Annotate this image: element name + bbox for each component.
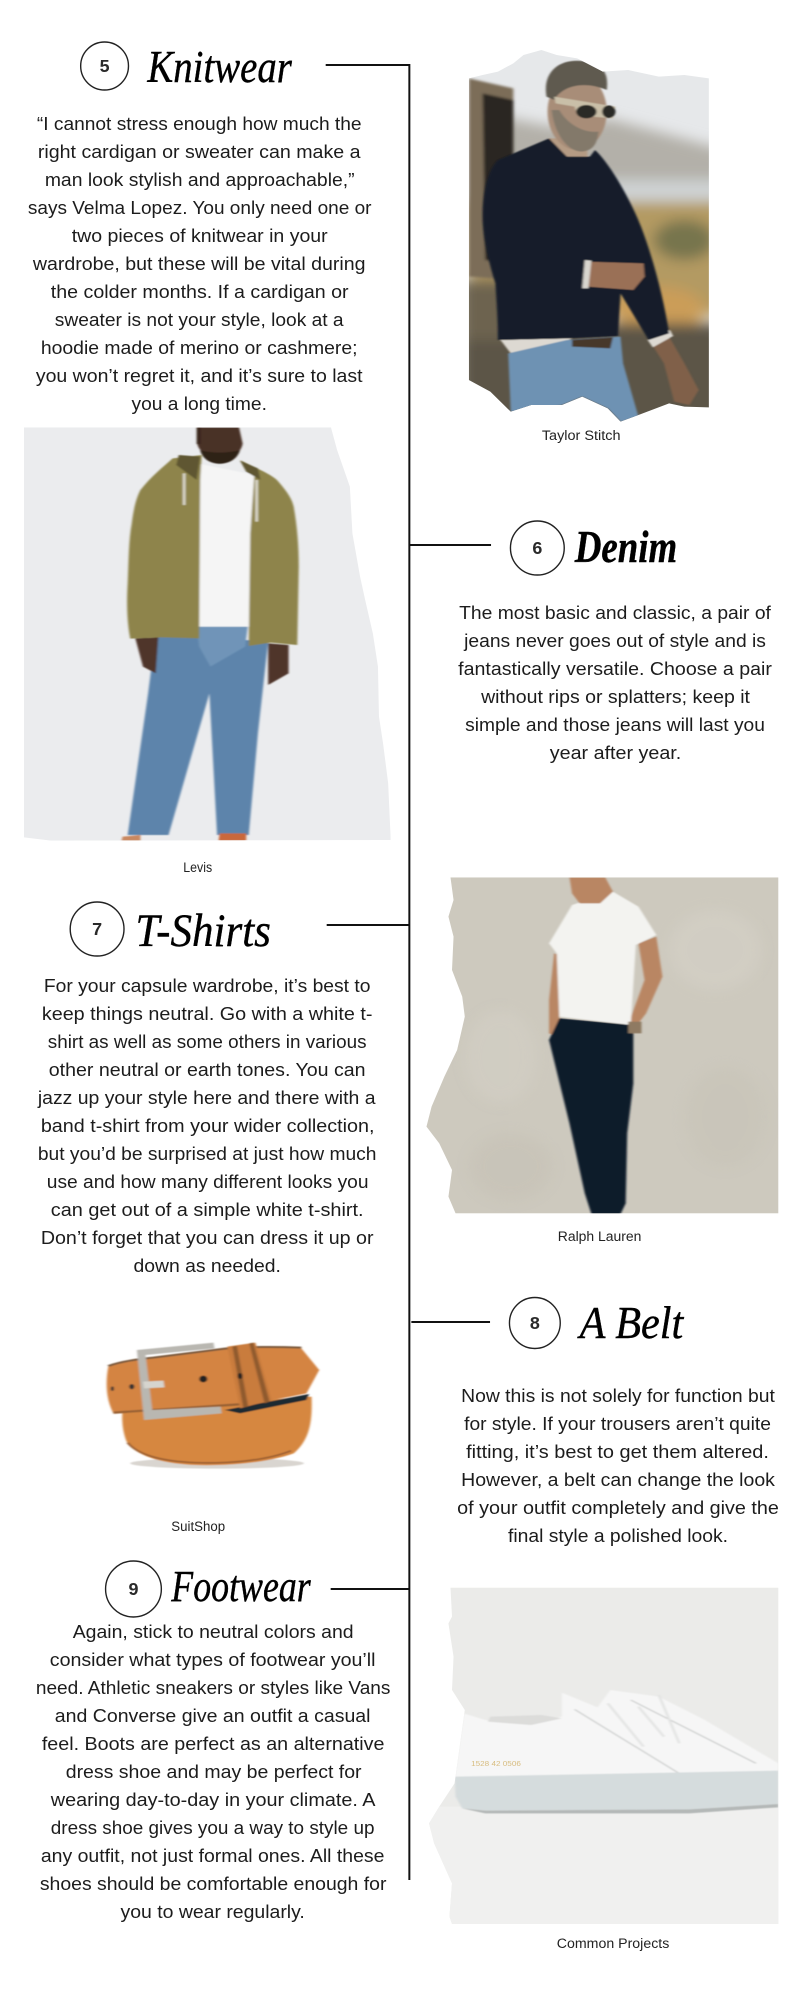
title A Belt: A Belt	[577, 1297, 684, 1348]
text block: footwear: feel. Boots are perfect as an alternative	[42, 1733, 384, 1754]
photo: white sneakers, Common Projects	[424, 1587, 781, 1925]
photo: man in white tee, Ralph Lauren	[424, 877, 781, 1215]
text block: t-shirts: can get out of a simple white t-shirt.	[51, 1199, 364, 1220]
connector line	[331, 1588, 409, 1590]
text block: knitwear	[28, 113, 372, 414]
head	[548, 73, 607, 150]
shoe upper	[455, 1690, 778, 1778]
photo: man in olive hoodie, Levis	[20, 427, 393, 843]
number badge 6	[510, 521, 564, 575]
photo: tan leather belt, SuitShop	[107, 1343, 319, 1469]
text block: t-shirts: other neutral or earth tones. You can	[49, 1059, 366, 1080]
hands	[135, 637, 158, 673]
text block: knitwear: “I cannot stress enough how much the	[37, 113, 362, 134]
text block: knitwear: says Velma Lopez. You only need one or	[28, 197, 372, 218]
text block: footwear: and Converse give an outfit a casual	[55, 1705, 371, 1726]
text block: knitwear: sweater is not your style, look at a	[55, 309, 344, 330]
holes	[199, 1376, 207, 1382]
section 5: knitwear heading	[81, 42, 409, 92]
section 7: t-shirts heading	[70, 902, 409, 957]
photo: man in navy sweater, Taylor Stitch	[468, 50, 709, 422]
connector line	[411, 1321, 490, 1323]
number badge 9: 9	[128, 1579, 138, 1599]
number badge 5	[81, 42, 128, 90]
shoe stamp: 1528 42 0506	[471, 1761, 521, 1768]
text block: footwear: you to wear regularly.	[121, 1901, 305, 1922]
text block: a belt: of your outfit completely and give the	[457, 1497, 779, 1518]
number badge 6: 6	[532, 538, 542, 558]
shoes	[219, 833, 246, 841]
text block: denim	[458, 602, 772, 763]
neck	[569, 877, 613, 903]
text block: t-shirts: Don’t forget that you can dress it up or	[41, 1227, 373, 1248]
text block: a belt: fitting, it’s best to get them altered.	[466, 1441, 769, 1462]
skin and shirt details	[651, 337, 699, 405]
head	[197, 427, 243, 458]
text block: knitwear: two pieces of knitwear in your	[72, 225, 328, 246]
jeans	[128, 633, 268, 835]
text block: a belt: Now this is not solely for function but	[461, 1385, 775, 1406]
connector line	[326, 64, 409, 66]
caption Common Projects: Common Projects	[557, 1935, 669, 1951]
timeline spine	[408, 64, 410, 1880]
text block: denim: simple and those jeans will last you	[465, 714, 765, 735]
text block: footwear: any outfit, not just formal ones. All these	[41, 1845, 384, 1866]
section 6: denim heading	[409, 521, 677, 575]
keepers	[227, 1343, 272, 1408]
text block: t-shirts: band t-shirt from your wider collection,	[41, 1115, 374, 1136]
text block: denim: jeans never goes out of style and is	[463, 630, 766, 651]
text block: footwear: consider what types of footwear you’ll	[50, 1649, 375, 1670]
title Footwear: Footwear	[170, 1563, 311, 1611]
text block: a belt: final style a polished look.	[508, 1525, 728, 1546]
text block: knitwear: hoodie made of merino or cashmere;	[41, 337, 358, 358]
text block: knitwear: you won’t regret it, and it’s sure to last	[36, 365, 363, 386]
text block: knitwear: wardrobe, but these will be vital during	[32, 253, 366, 274]
caption Taylor Stitch: Taylor Stitch	[542, 427, 621, 443]
arms	[629, 937, 662, 1027]
text block: footwear	[36, 1621, 390, 1922]
text block: knitwear: right cardigan or sweater can make a	[38, 141, 361, 162]
pants	[549, 1018, 633, 1214]
text block: footwear: shoes should be comfortable enough for	[40, 1873, 386, 1894]
text block: t-shirts: keep things neutral. Go with a white t-	[42, 1003, 373, 1024]
sole	[455, 1771, 778, 1811]
text block: knitwear: you a long time.	[131, 393, 267, 414]
text block: denim: without rips or splatters; keep it	[480, 686, 750, 707]
buckle	[137, 1343, 222, 1420]
section 9: footwear heading	[106, 1561, 409, 1617]
title Denim: Denim	[574, 521, 677, 572]
text block: t-shirts: For your capsule wardrobe, it’s best to	[44, 975, 371, 996]
title Knitwear: Knitwear	[147, 42, 292, 92]
text block: footwear: need. Athletic sneakers or styles like Vans	[36, 1677, 390, 1698]
text block: denim: The most basic and classic, a pair of	[459, 602, 772, 623]
text block: denim: fantastically versatile. Choose a pair	[458, 658, 772, 679]
text block: knitwear: the colder months. If a cardigan or	[51, 281, 349, 302]
text block: t-shirts: jazz up your style here and there with a	[37, 1087, 376, 1108]
text block: footwear: dress shoe and may be perfect for	[66, 1761, 362, 1782]
text block: t-shirts: but you’d be surprised at just how much	[38, 1143, 376, 1164]
hoodie	[127, 455, 202, 639]
caption Ralph Lauren: Ralph Lauren	[558, 1228, 641, 1244]
text block: t-shirts	[37, 975, 376, 1276]
number badge 8	[509, 1298, 560, 1348]
caption Levis: Levis	[183, 859, 212, 875]
section 8: a belt heading	[411, 1297, 684, 1348]
caption SuitShop: SuitShop	[171, 1518, 225, 1534]
text block: footwear: dress shoe gives you a way to style up	[51, 1817, 374, 1838]
text block: knitwear: man look stylish and approachable,”	[45, 169, 355, 190]
text block: footwear: wearing day-to-day in your climate. A	[50, 1789, 376, 1810]
connector line	[327, 924, 409, 926]
tee	[549, 892, 656, 1025]
text block: a belt: However, a belt can change the look	[461, 1469, 776, 1490]
text block: t-shirts: down as needed.	[133, 1255, 281, 1276]
title T-Shirts: T-Shirts	[135, 905, 271, 957]
sweater	[483, 138, 669, 340]
text block: denim: year after year.	[550, 742, 681, 763]
text block: footwear: Again, stick to neutral colors and	[73, 1621, 354, 1642]
text block: a belt	[457, 1385, 779, 1546]
number badge 7: 7	[92, 919, 102, 939]
number badge 9	[106, 1561, 161, 1617]
text block: t-shirts: shirt as well as some others in various	[48, 1031, 367, 1052]
connector line	[409, 544, 491, 546]
text block: a belt: for style. If your trousers aren’t quite	[464, 1413, 771, 1434]
number badge 7	[70, 902, 124, 956]
text block: t-shirts: use and how many different looks you	[47, 1171, 369, 1192]
number badge 8: 8	[530, 1313, 540, 1333]
tee	[197, 463, 255, 627]
number badge 5: 5	[100, 56, 110, 76]
